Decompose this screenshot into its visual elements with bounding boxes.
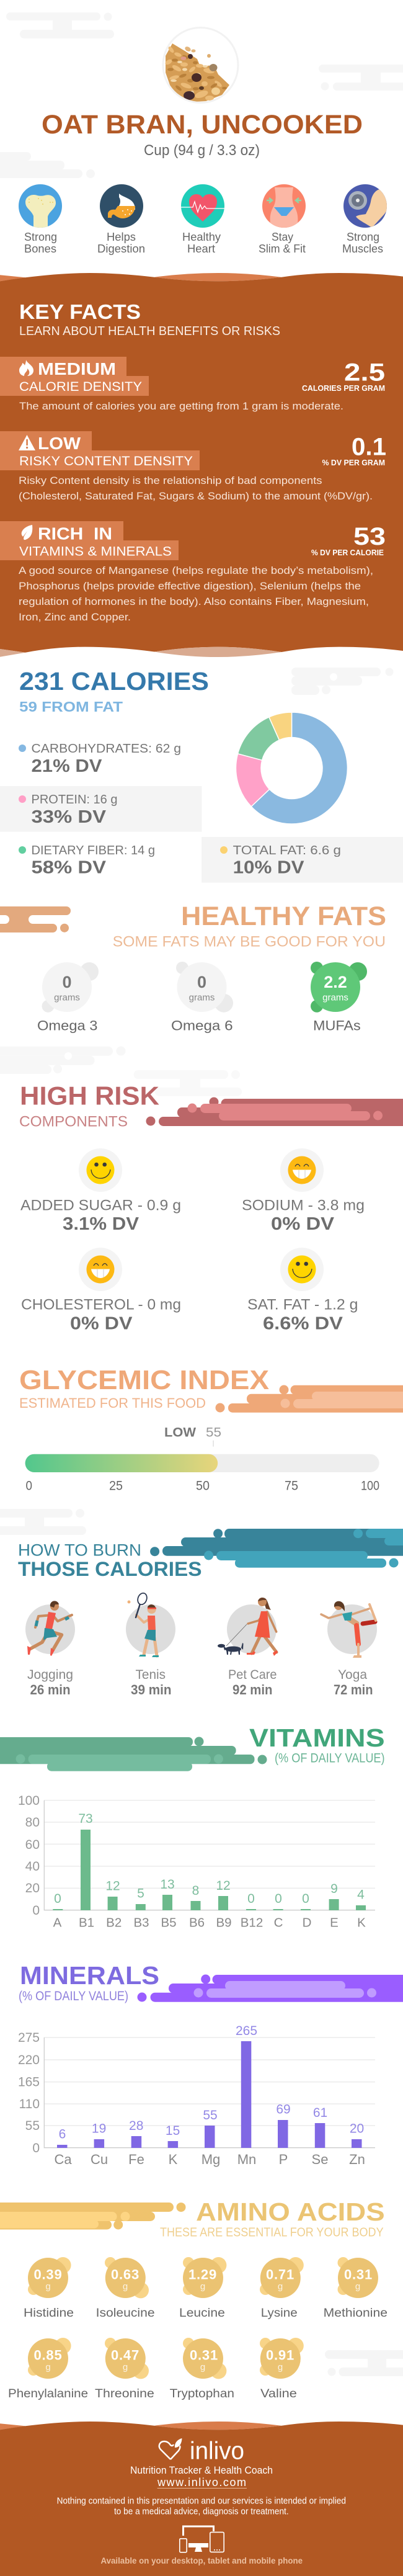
amino: valine (260, 2338, 304, 2400)
amino: methionine (324, 2257, 388, 2320)
label: helps digestion: Helps (107, 231, 136, 243)
label: slim and fit (259, 231, 306, 255)
amino: tryptophan: Tryptophan (170, 2387, 234, 2400)
heading: glycemic index: GLYCEMIC INDEX (19, 1365, 269, 1395)
stat: omega 6: grams (189, 993, 215, 1003)
decoration: burn banner (150, 1529, 403, 1568)
risky content block (0, 431, 386, 502)
item: added sugar: 3.1% DV (63, 1214, 140, 1234)
value: calories per gram: CALORIES PER GRAM (302, 383, 385, 393)
decoration: vitamins banner (0, 1737, 267, 1771)
legend: dietary fiber: DIETARY FIBER: 14 g (31, 844, 155, 857)
bar chart: minerals: 61 (313, 2106, 327, 2120)
subheading: components: COMPONENTS (19, 1114, 128, 1130)
gauge scale: 0 (26, 1479, 32, 1493)
label: helps digestion (97, 231, 145, 255)
amino: methionine: 0.31 (344, 2267, 373, 2282)
legend: total fat (202, 837, 403, 883)
amino: tryptophan: 0.31 (190, 2348, 218, 2363)
amino: isoleucine: g (123, 2281, 128, 2292)
label: strong bones: Bones (24, 243, 56, 255)
subheading: estimated: ESTIMATED FOR THIS FOOD (19, 1395, 206, 1411)
bar chart: minerals: 6 (59, 2127, 66, 2142)
bar chart: vitamins: 0 (54, 1892, 61, 1906)
description: risky content: Risky Content density is the relationship of bad components (19, 475, 322, 486)
legend: protein: 33% DV (31, 807, 107, 827)
amino: phenylalanine (8, 2338, 88, 2400)
serving size: Cup (94 g / 3.3 oz) (144, 142, 260, 159)
amino: isoleucine (96, 2257, 155, 2320)
panel: amino acids (0, 2198, 388, 2400)
food image (163, 27, 238, 103)
panel: high risk components (19, 1081, 403, 1334)
gauge bar (25, 1454, 379, 1472)
description: vitamins and minerals: regulation of hormones in the body). Also contains Fiber, Magnesium, (19, 596, 369, 607)
amino: threonine: 0.47 (111, 2348, 140, 2363)
bar chart: vitamins: 20 (25, 1881, 40, 1895)
activity: tennis: Tenis (135, 1668, 166, 1682)
gauge scale (26, 1479, 379, 1493)
value: dv per calorie: % DV PER CALORIE (311, 548, 384, 557)
bar chart: minerals: Se (312, 2152, 328, 2167)
bar chart: vitamins: B12 (241, 1916, 263, 1930)
description: calorie density: The amount of calories you are getting from 1 gram is moderate. (19, 401, 343, 412)
bar chart: vitamins: 12 (105, 1879, 120, 1894)
website link: www.inlivo.com (157, 2476, 246, 2489)
activity: yoga: 72 min (334, 1682, 373, 1697)
bar chart: vitamins: K (357, 1916, 366, 1930)
value: calories per gram (302, 359, 385, 393)
activity: jogging: Jogging (27, 1668, 73, 1682)
amino: tryptophan: g (200, 2362, 205, 2373)
panel: vitamins (0, 1724, 385, 1930)
value: dv per calorie (311, 523, 386, 557)
amino: lysine: g (278, 2281, 283, 2292)
label: vitamins and minerals: VITAMINS & MINERALS (19, 543, 172, 558)
stat: mufas (311, 962, 367, 1034)
amino: histidine: g (45, 2281, 51, 2292)
vitamins and minerals block (0, 521, 386, 623)
stat: omega 6: 0 (197, 973, 206, 991)
legend: dietary fiber: 58% DV (31, 858, 107, 878)
amino: methionine: Methionine (324, 2307, 388, 2320)
activity: yoga: Yoga (338, 1668, 367, 1682)
bar chart: vitamins: 8 (192, 1884, 199, 1898)
bar chart: vitamins: B1 (79, 1916, 94, 1930)
label: low 55 (164, 1426, 221, 1440)
item: sodium (242, 1148, 365, 1234)
tagline: Nutrition Tracker & Health Coach (130, 2464, 273, 2476)
amino: lysine: Lysine (261, 2307, 298, 2320)
gauge scale: 100 (361, 1479, 379, 1493)
amino: valine: Valine (260, 2387, 297, 2400)
panel: key facts (0, 273, 403, 657)
amino: histidine: Histidine (24, 2307, 74, 2320)
logo: inlivo (159, 2437, 244, 2464)
value: dv per calorie: 53 (353, 523, 386, 550)
value: dv per gram (322, 433, 386, 467)
label: medium: MEDIUM (38, 359, 116, 378)
stat: mufas: 2.2 (324, 973, 347, 991)
heading: healthy fats: HEALTHY FATS (181, 901, 386, 931)
heading: key facts (19, 300, 280, 338)
bar chart: minerals: 265 (236, 2024, 257, 2038)
item: sodium: SODIUM - 3.8 mg (242, 1197, 365, 1214)
legend: dietary fiber (19, 844, 155, 878)
bar chart: vitamins: 0 (32, 1903, 40, 1918)
title: OAT BRAN, UNCOOKED (42, 110, 363, 140)
legend: protein (0, 786, 202, 832)
bar chart: vitamins: D (303, 1916, 311, 1930)
icon: slim and fit (262, 184, 306, 230)
panel: glycemic index (19, 1365, 403, 1493)
description: vitamins and minerals: Iron, Zinc and Copper. (19, 612, 131, 623)
icon: helps digestion (100, 184, 143, 228)
heading: calories: 231 CALORIES (19, 667, 209, 695)
bar chart: vitamins: C (274, 1916, 283, 1930)
label: rich in: RICH IN (38, 524, 112, 543)
activity: pet care: Pet Care (228, 1668, 277, 1682)
activity: pet care: 92 min (232, 1682, 273, 1697)
legend: carbohydrates: 21% DV (31, 756, 102, 776)
item: saturated fat: 6.6% DV (263, 1314, 343, 1334)
gauge scale: 75 (285, 1479, 298, 1493)
amino: leucine: g (200, 2281, 205, 2292)
bar chart: vitamins: 40 (25, 1859, 40, 1874)
description: risky content: (Cholesterol, Saturated Fat, Sugars & Sodium) to the amount (%DV/gr). (19, 491, 373, 502)
stat: omega 3 (37, 962, 99, 1034)
icon: healthy heart (181, 184, 224, 228)
bar chart: minerals: 110 (19, 2097, 40, 2111)
stat: omega 3: Omega 3 (37, 1018, 98, 1034)
amino: leucine: Leucine (179, 2307, 225, 2320)
stat: omega 6 (171, 962, 233, 1034)
label: calorie density: CALORIE DENSITY (19, 379, 142, 394)
description: vitamins and minerals (19, 565, 373, 623)
label: low: LOW (38, 434, 81, 453)
label: strong muscles: Muscles (342, 243, 383, 255)
bar chart: minerals: 19 (92, 2122, 106, 2136)
availability note: Available on your desktop, tablet and mobile phone (100, 2556, 303, 2565)
subheading: percent daily value: (% OF DAILY VALUE) (19, 1989, 128, 2003)
amino: valine: g (278, 2362, 283, 2373)
bar chart: minerals: 69 (276, 2103, 291, 2117)
icon: flame (19, 360, 33, 376)
bar chart: vitamins: 4 (357, 1888, 365, 1902)
legend: total fat: TOTAL FAT: 6.6 g (233, 844, 341, 857)
label: strong muscles (342, 231, 383, 255)
bar chart: vitamins: 100 (18, 1794, 40, 1808)
bar chart: minerals: 165 (18, 2075, 40, 2090)
panel: how to burn calories (18, 1529, 403, 1697)
heading: calories (19, 667, 209, 715)
icon: devices (180, 2526, 224, 2552)
stat: omega 3: grams (54, 993, 80, 1003)
amino: phenylalanine: Phenylalanine (8, 2387, 88, 2400)
stat: mufas: grams (322, 993, 348, 1003)
bar chart: vitamins: 12 (216, 1879, 231, 1893)
panel: healthy fats (0, 901, 386, 1034)
icon: leaf (22, 525, 32, 540)
label: strong bones (24, 231, 57, 255)
legend: protein: PROTEIN: 16 g (31, 793, 118, 807)
bar chart: vitamins: B2 (106, 1916, 122, 1930)
description: vitamins and minerals: A good source of Manganese (helps regulate the body’s metabolism), (19, 565, 373, 576)
disclaimer (57, 2497, 346, 2516)
amino: lysine: 0.71 (266, 2267, 294, 2282)
panel: footer (0, 2422, 403, 2576)
amino: methionine: g (355, 2281, 360, 2292)
bar chart: vitamins: A (53, 1916, 62, 1930)
item: saturated fat: SAT. FAT - 1.2 g (247, 1297, 358, 1313)
disclaimer: to be a medical advice, diagnosis or treatment. (114, 2507, 289, 2516)
panel: minerals (18, 1961, 403, 2167)
description: vitamins and minerals: Phosphorus (helps provide effective digestion), Selenium (helps the (19, 581, 361, 592)
amino: threonine: g (123, 2362, 128, 2373)
bar chart: vitamins: 80 (25, 1815, 40, 1830)
bar chart: vitamins: 0 (275, 1892, 282, 1906)
heading: key facts: KEY FACTS (19, 300, 141, 323)
label: risky content density: RISKY CONTENT DENSITY (19, 454, 193, 468)
logo: inlivo: inlivo (190, 2437, 244, 2464)
amino: isoleucine: 0.63 (111, 2267, 140, 2282)
bar chart: minerals: 55 (25, 2119, 40, 2133)
bar chart: minerals: Cu (91, 2152, 108, 2167)
amino: phenylalanine: 0.85 (33, 2348, 63, 2363)
label: helps digestion: Digestion (97, 243, 145, 255)
label: slim and fit: Slim & Fit (259, 243, 306, 255)
amino: histidine (24, 2257, 74, 2320)
icon: warning (19, 435, 35, 450)
amino: tryptophan (170, 2338, 234, 2400)
heading: vitamins: VITAMINS (249, 1724, 385, 1752)
legend: carbohydrates (19, 742, 181, 776)
bar chart: minerals: 275 (18, 2031, 40, 2045)
bar chart: vitamins: B5 (161, 1916, 177, 1930)
activity: jogging (25, 1601, 75, 1697)
gauge scale: 50 (196, 1479, 210, 1493)
heading: high risk: HIGH RISK (20, 1081, 159, 1111)
bar chart: vitamins: B6 (189, 1916, 205, 1930)
bar chart: vitamins (18, 1794, 375, 1930)
heading: key facts: LEARN ABOUT HEALTH BENEFITS OR RISKS (19, 324, 280, 338)
activity: yoga (321, 1601, 377, 1697)
heading: minerals: MINERALS (20, 1961, 159, 1990)
decoration: healthy fats banner (0, 906, 71, 932)
heading: amino acids: AMINO ACIDS (196, 2198, 385, 2226)
bar chart: vitamins: 0 (302, 1892, 309, 1906)
donut chart (236, 712, 347, 824)
item: added sugar (20, 1148, 181, 1234)
bar chart: vitamins: E (330, 1916, 339, 1930)
item: cholesterol: 0% DV (70, 1314, 133, 1334)
amino: threonine (95, 2338, 154, 2400)
bar chart: vitamins: 5 (137, 1887, 144, 1901)
bar chart: minerals: 0 (32, 2141, 40, 2155)
amino: threonine: Threonine (95, 2387, 154, 2400)
bar chart: minerals: P (279, 2152, 288, 2167)
label: low 55: 55 (206, 1426, 221, 1440)
bar chart: minerals (18, 2024, 375, 2167)
item: cholesterol (21, 1248, 181, 1334)
item: sodium: 0% DV (271, 1214, 335, 1234)
label: healthy heart (182, 231, 221, 255)
amino: isoleucine: Isoleucine (96, 2307, 155, 2320)
bar chart: vitamins: 9 (330, 1882, 338, 1896)
stat: omega 3: 0 (62, 973, 72, 991)
item: cholesterol: CHOLESTEROL - 0 mg (21, 1297, 181, 1313)
amino: phenylalanine: g (45, 2362, 51, 2373)
value: dv per gram: % DV PER GRAM (322, 458, 385, 467)
item: saturated fat (247, 1248, 358, 1334)
stat: omega 6: Omega 6 (171, 1018, 233, 1034)
bar chart: vitamins: B9 (216, 1916, 232, 1930)
decoration: amino banner (0, 2203, 186, 2230)
item: added sugar: ADDED SUGAR - 0.9 g (20, 1197, 181, 1214)
activity: jogging: 26 min (30, 1682, 71, 1697)
bar chart: minerals: Mn (237, 2152, 256, 2167)
value: dv per gram: 0.1 (352, 433, 386, 460)
bar chart: minerals: 15 (166, 2124, 180, 2138)
bar chart: minerals: K (169, 2152, 178, 2167)
amino: leucine (179, 2257, 226, 2320)
label: strong bones: Strong (24, 231, 57, 243)
activity: tennis (126, 1592, 175, 1697)
bar chart: minerals: Ca (54, 2152, 72, 2167)
icon: strong bones (19, 184, 62, 230)
bar chart: vitamins: 60 (25, 1838, 40, 1852)
bar chart: vitamins: 0 (247, 1892, 255, 1906)
bar chart: minerals: Mg (202, 2152, 220, 2167)
amino: valine: 0.91 (266, 2348, 294, 2363)
icon: strong muscles (343, 184, 391, 228)
bar chart: minerals: Fe (128, 2152, 144, 2167)
label: healthy heart: Healthy (182, 231, 221, 243)
legend: carbohydrates: CARBOHYDRATES: 62 g (31, 742, 181, 756)
description: risky content (19, 475, 373, 502)
bar chart: minerals: 20 (350, 2122, 364, 2136)
label: strong muscles: Strong (347, 231, 379, 243)
bar chart: minerals: 28 (129, 2119, 143, 2133)
subheading: percent daily value: (% OF DAILY VALUE) (275, 1751, 385, 1766)
decoration: glycemic banner (216, 1385, 403, 1413)
activity: tennis: 39 min (131, 1682, 171, 1697)
subheading: healthy fats: SOME FATS MAY BE GOOD FOR YOU (113, 934, 386, 950)
panel: calories (0, 667, 403, 883)
disclaimer: Nothing contained in this presentation and our services is intended or implied (57, 2497, 346, 2507)
bar chart: vitamins: 13 (160, 1877, 175, 1892)
bar chart: minerals: 55 (203, 2108, 218, 2122)
activity: pet care (218, 1598, 278, 1697)
heading: those calories: THOSE CALORIES (18, 1558, 202, 1580)
amino: lysine (260, 2257, 304, 2320)
bar chart: minerals: Zn (349, 2152, 365, 2167)
label: healthy heart: Heart (187, 243, 215, 255)
gauge scale: 25 (109, 1479, 123, 1493)
label: slim and fit: Stay (272, 231, 293, 243)
legend: total fat: 10% DV (233, 858, 304, 878)
bar chart: vitamins: 73 (78, 1812, 93, 1826)
calorie density block (0, 357, 385, 412)
label: low 55: LOW (164, 1426, 196, 1440)
decoration: high risk banner (146, 1097, 403, 1126)
decoration: minerals banner (138, 1974, 403, 2002)
benefit icons row (19, 184, 391, 255)
amino: histidine: 0.39 (33, 2267, 63, 2282)
amino: leucine: 1.29 (188, 2267, 217, 2282)
value: calories per gram: 2.5 (344, 359, 385, 386)
heading: how to burn: HOW TO BURN (18, 1541, 141, 1560)
bar chart: vitamins: B3 (133, 1916, 149, 1930)
heading: calories: 59 FROM FAT (19, 699, 123, 715)
bar chart: minerals: 220 (18, 2053, 40, 2067)
stat: mufas: MUFAs (313, 1018, 361, 1034)
